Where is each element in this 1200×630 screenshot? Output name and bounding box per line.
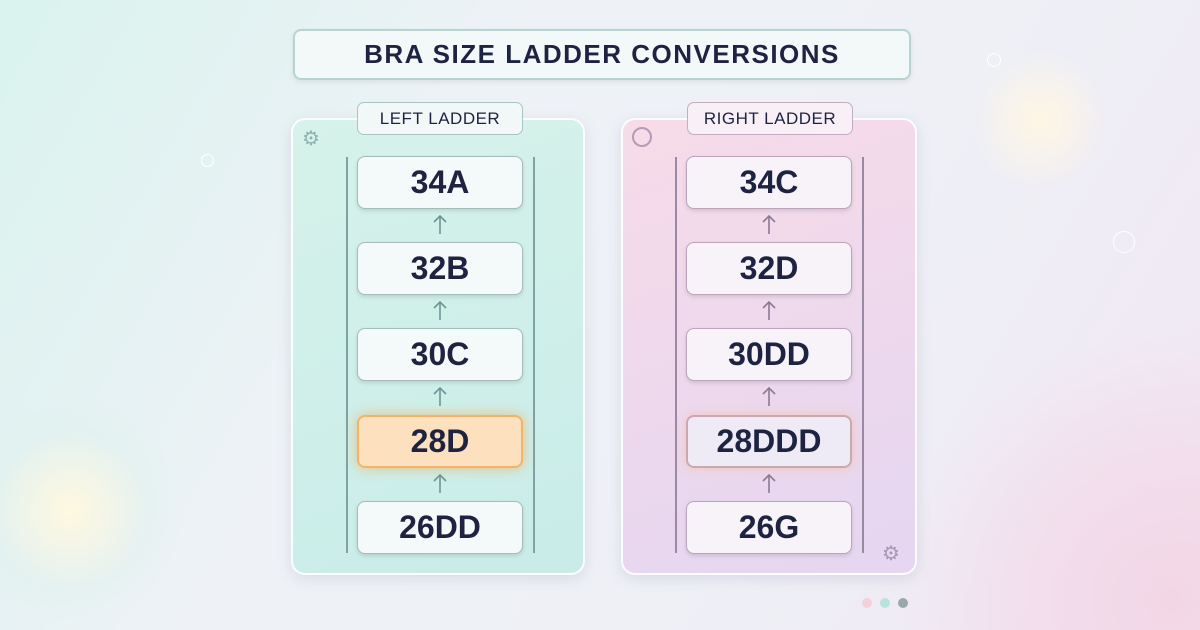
left rails <box>346 157 535 553</box>
icon: gear right: ⚙ <box>882 543 900 565</box>
decorative blobs <box>0 390 200 630</box>
panel: left ladder <box>291 118 585 575</box>
right arrows <box>762 215 776 493</box>
icon: target <box>632 127 652 147</box>
right boxes <box>680 156 858 557</box>
right boxes: 34C <box>740 164 798 200</box>
left boxes: 30C <box>411 336 469 372</box>
right boxes: 32D <box>740 250 798 286</box>
left arrows <box>434 215 446 493</box>
left label: LEFT LADDER <box>380 108 500 128</box>
icon: gear left: ⚙ <box>302 128 320 150</box>
left boxes <box>348 156 532 557</box>
right label <box>687 102 853 135</box>
title: BRA SIZE LADDER CONVERSIONS <box>364 39 840 69</box>
left boxes: 34A <box>411 164 469 200</box>
right boxes: 26G <box>739 509 799 545</box>
title <box>293 29 911 80</box>
dots <box>862 598 908 608</box>
left label <box>357 102 523 135</box>
left boxes: 26DD <box>399 509 481 545</box>
right rails <box>675 157 864 553</box>
right label: RIGHT LADDER <box>704 108 836 128</box>
right boxes: 30DD <box>728 336 810 372</box>
right boxes: 28DDD <box>717 423 821 459</box>
panel: right ladder <box>621 118 917 575</box>
left boxes: 28D <box>411 423 469 459</box>
left boxes: 32B <box>411 250 469 286</box>
